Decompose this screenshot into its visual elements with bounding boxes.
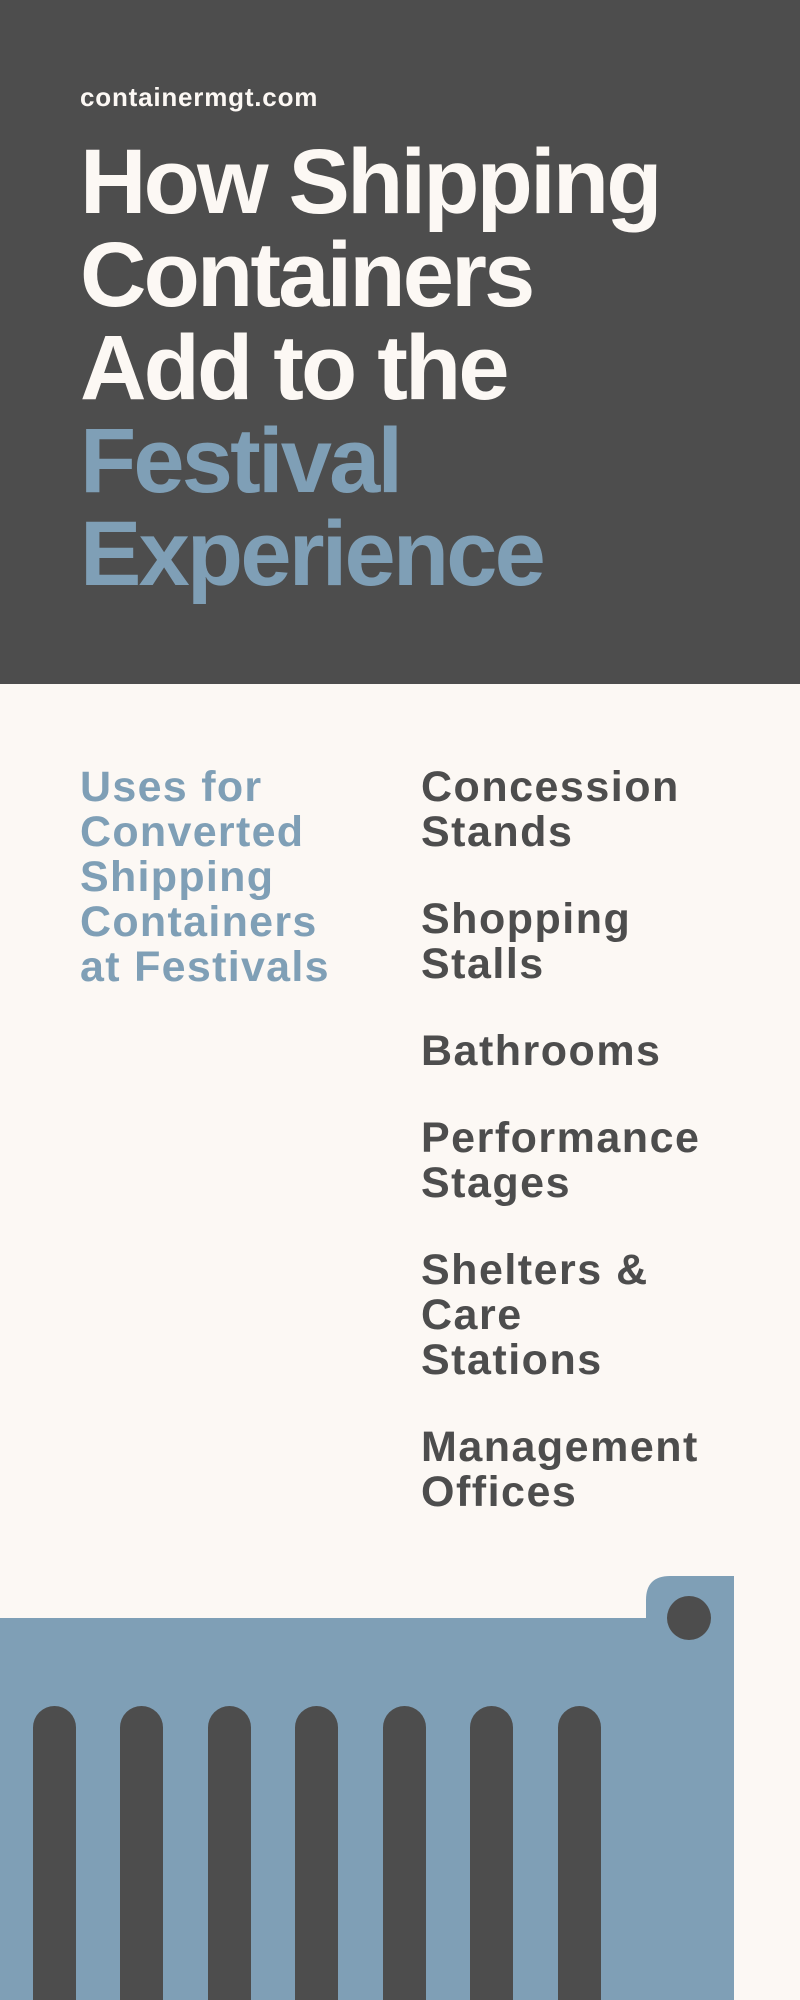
- subtitle: Shipping: [80, 853, 274, 901]
- title: Experience: [80, 503, 543, 605]
- subtitle: Containers: [80, 898, 318, 946]
- title: Add to the: [80, 317, 507, 419]
- list of uses: Management: [421, 1423, 699, 1471]
- subtitle: Uses for: [80, 763, 262, 811]
- list of uses: Stalls: [421, 940, 545, 988]
- list of uses: Stations: [421, 1336, 603, 1384]
- subtitle: at Festivals: [80, 943, 330, 991]
- site name: containermgt.com: [80, 82, 318, 112]
- subtitle: [80, 763, 330, 991]
- title: How Shipping: [80, 131, 660, 233]
- title: [80, 131, 660, 605]
- title: Festival: [80, 410, 400, 512]
- list of uses: Shopping: [421, 895, 631, 943]
- header panel: [0, 0, 800, 684]
- list of uses: Concession: [421, 763, 680, 811]
- list of uses: Care: [421, 1291, 523, 1339]
- list of uses: Bathrooms: [421, 1027, 661, 1075]
- list of uses: Stages: [421, 1159, 571, 1207]
- list of uses: Stands: [421, 808, 573, 856]
- subtitle: Converted: [80, 808, 304, 856]
- illustration: shipping container: [0, 1576, 734, 2000]
- list of uses: [421, 763, 700, 1516]
- list of uses: Shelters &: [421, 1246, 649, 1294]
- title: Containers: [80, 224, 533, 326]
- list of uses: Performance: [421, 1114, 700, 1162]
- list of uses: Offices: [421, 1468, 577, 1516]
